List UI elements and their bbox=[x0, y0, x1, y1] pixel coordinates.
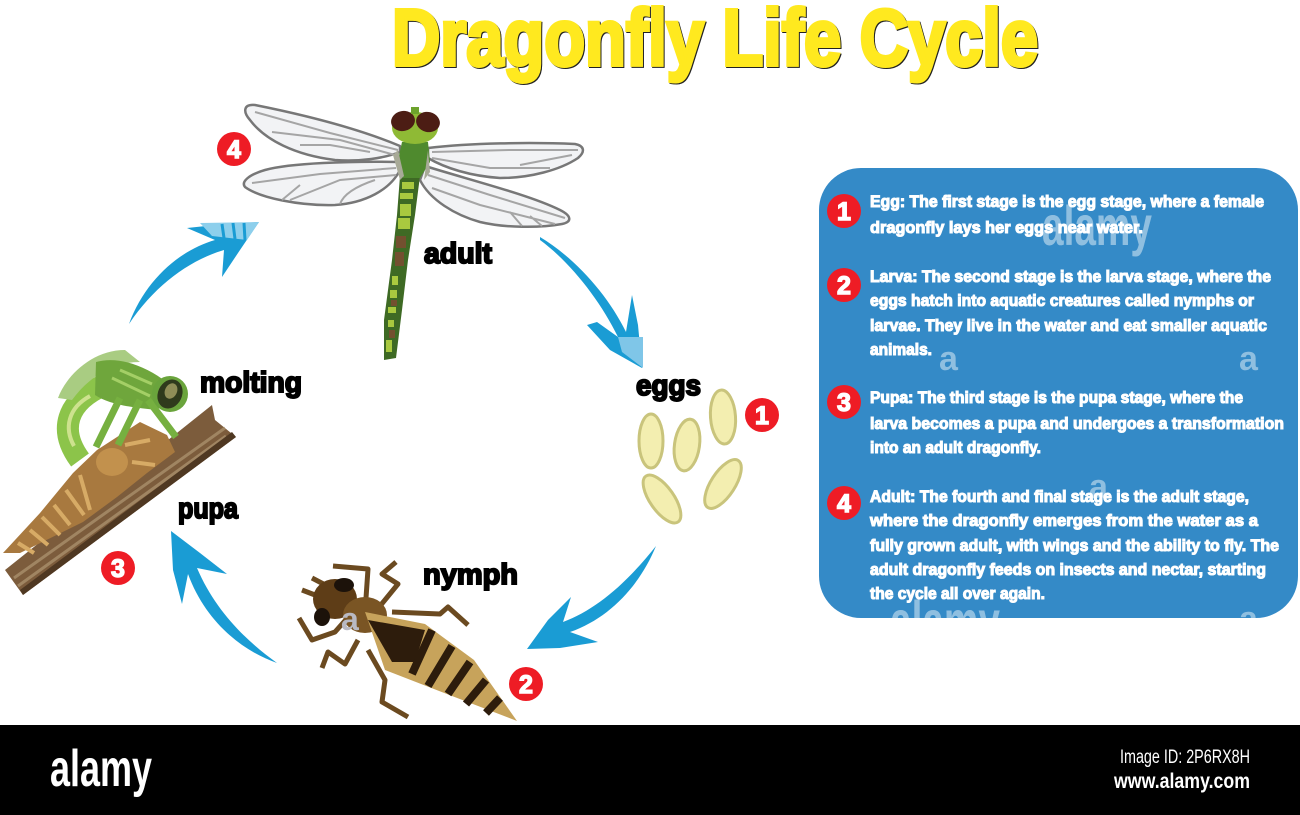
step 1 text: egg bbox=[827, 192, 1264, 237]
step 4 text: adult: fully grown adult, with wings and the ability to fly. The bbox=[870, 536, 1279, 555]
illustration: nymph bbox=[299, 562, 517, 721]
badge: 4: 4 bbox=[227, 136, 241, 164]
badge: 2 bbox=[509, 667, 543, 701]
head bbox=[313, 579, 357, 619]
step 4 text: adult: the cycle all over again. bbox=[870, 584, 1045, 603]
step 2 text: larva bbox=[827, 267, 1271, 359]
thorax bbox=[398, 142, 430, 178]
step 4 text: adult: 4 bbox=[837, 490, 851, 518]
illustration: adult dragonfly bbox=[244, 105, 583, 360]
badge: 1: 1 bbox=[755, 402, 769, 430]
step 2 text: larva: larvae. They live in the water and eat smaller aquatic bbox=[870, 316, 1267, 335]
step 4 text: adult: Adult: The fourth and final stage is the adult stage, bbox=[870, 487, 1249, 506]
arrow: adult to eggs bbox=[540, 237, 643, 368]
footer bar bbox=[0, 725, 1300, 815]
abdomen bbox=[384, 176, 420, 360]
step 2 text: larva: 2 bbox=[837, 272, 851, 300]
step 2 text: larva: Larva: The second stage is the larva stage, where the bbox=[870, 267, 1271, 286]
arrow: eggs to nymph bbox=[527, 546, 656, 649]
step 4 text: adult: adult dragonfly feeds on insects and nectar, starting bbox=[870, 560, 1266, 579]
step 1 text: egg: 1 bbox=[837, 198, 851, 226]
nymph watermark: a bbox=[341, 601, 359, 637]
step 2 text: larva: animals. bbox=[870, 340, 932, 359]
badge: 3: 3 bbox=[111, 555, 125, 583]
arrow: nymph to pupa bbox=[171, 531, 277, 663]
legs and antennae bbox=[299, 562, 468, 717]
illustration: branch, pupa and molting insect bbox=[3, 350, 236, 595]
step 3 text: pupa: larva becomes a pupa and undergoes a transformation bbox=[870, 414, 1284, 433]
badge: 1 bbox=[745, 398, 779, 432]
panel watermarks bbox=[892, 204, 1258, 618]
panel: stage descriptions bbox=[819, 168, 1298, 652]
step 3 text: pupa: into an adult dragonfly. bbox=[870, 438, 1041, 457]
footer image id: Image ID: 2P6RX8H bbox=[1120, 747, 1250, 768]
footer logo: alamy bbox=[50, 740, 152, 798]
step 4 text: adult: where the dragonfly emerges from the water as a bbox=[869, 511, 1259, 530]
panel watermarks: alamy bbox=[890, 589, 1000, 652]
molting insect bbox=[58, 350, 188, 460]
step 1 text: egg: Egg: The first stage is the egg stage, where a female bbox=[870, 192, 1264, 211]
wing veins bbox=[252, 112, 578, 226]
thorax bbox=[343, 597, 387, 633]
footer url: www.alamy.com bbox=[1113, 770, 1250, 793]
panel watermarks: a bbox=[1239, 600, 1259, 638]
step 4 text: adult bbox=[827, 486, 1279, 603]
step 3 text: pupa bbox=[827, 385, 1284, 457]
arrow: molting to adult bbox=[129, 222, 259, 324]
label: eggs: eggs bbox=[636, 370, 701, 402]
abdomen bbox=[365, 612, 517, 721]
panel watermarks: alamy bbox=[1042, 194, 1152, 257]
pupa shell bbox=[3, 422, 175, 553]
badge: 3 bbox=[101, 551, 135, 585]
label: nymph: nymph bbox=[423, 559, 518, 591]
head bbox=[392, 112, 438, 144]
illustration: eggs bbox=[636, 389, 748, 529]
badge: 4 bbox=[217, 132, 251, 166]
label: molting: molting bbox=[200, 367, 302, 399]
egg cluster shapes bbox=[636, 389, 748, 529]
wings bbox=[244, 105, 583, 227]
step 1 text: egg: dragonfly lays her eggs near water. bbox=[870, 218, 1143, 237]
panel watermarks: a bbox=[1239, 340, 1259, 378]
branch bbox=[5, 405, 236, 595]
step 3 text: pupa: Pupa: The third stage is the pupa stage, where the bbox=[870, 388, 1243, 407]
step 2 text: larva: eggs hatch into aquatic creatures called nymphs or bbox=[870, 291, 1254, 310]
panel watermarks: a bbox=[939, 340, 959, 378]
label: pupa: pupa bbox=[178, 493, 239, 525]
label: adult: adult bbox=[424, 238, 492, 270]
panel watermarks: a bbox=[1089, 468, 1109, 506]
step 3 text: pupa: 3 bbox=[837, 389, 851, 417]
badge: 2: 2 bbox=[519, 671, 533, 699]
